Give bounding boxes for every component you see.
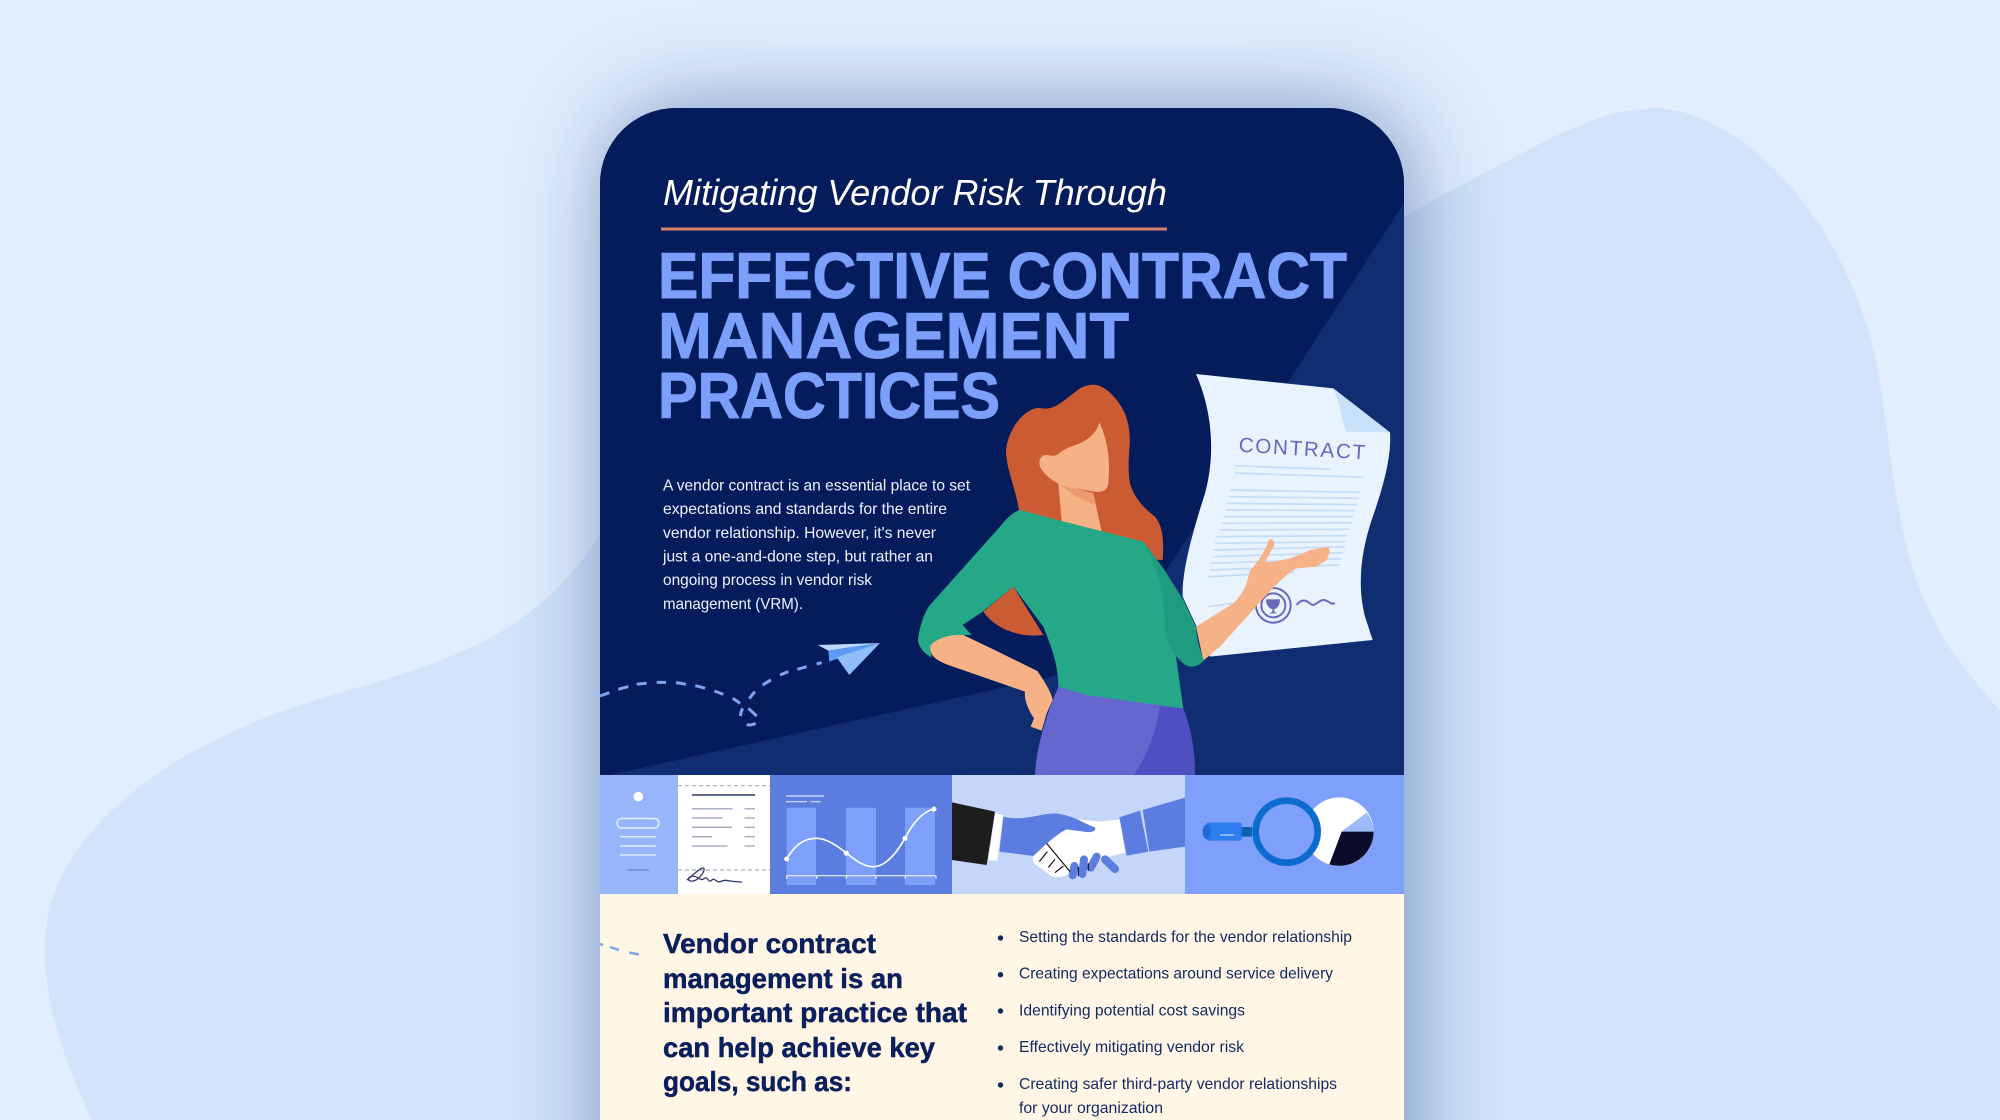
goals heading: goals, such as:	[663, 1066, 852, 1097]
skirt	[1035, 687, 1195, 775]
goals bullet list: Creating safer third-party vendor relationships	[1019, 1076, 1337, 1093]
hair	[983, 385, 1163, 636]
main heading: PRACTICES	[658, 359, 1000, 432]
left arm	[930, 635, 1053, 731]
hero panel background	[600, 108, 1404, 775]
goals bullet list: Setting the standards for the vendor relationship	[1019, 929, 1352, 946]
goals bullet list	[998, 929, 1352, 1117]
main heading	[658, 239, 1347, 432]
main heading: EFFECTIVE CONTRACT	[658, 239, 1347, 312]
title: subtitle line: Mitigating Vendor Risk Through	[663, 172, 1167, 213]
icon tile: bar and line chart	[770, 775, 952, 894]
right arm	[1196, 539, 1330, 661]
cream goals panel	[600, 894, 1404, 1120]
face	[1039, 422, 1109, 492]
goals heading: important practice that	[663, 997, 967, 1028]
intro paragraph: management (VRM).	[663, 596, 803, 613]
goals heading: management is an	[663, 963, 903, 994]
icon tile: signed document	[678, 775, 770, 894]
intro paragraph: ongoing process in vendor risk	[663, 572, 873, 589]
intro paragraph: just a one-and-done step, but rather an	[662, 548, 933, 566]
illustration: contract document	[1183, 374, 1390, 657]
neck	[1058, 483, 1102, 532]
intro paragraph: expectations and standards for the entire	[663, 501, 947, 518]
goals bullet list: Creating expectations around service delivery	[1019, 966, 1333, 982]
illustration: woman presenting contract	[918, 385, 1330, 775]
intro paragraph: A vendor contract is an essential place to set	[663, 478, 971, 494]
infographic card	[600, 108, 1404, 1120]
intro paragraph	[662, 478, 971, 613]
right sleeve	[1145, 543, 1204, 667]
goals heading: Vendor contract	[663, 928, 876, 959]
icon: paper plane with dashed trail	[600, 643, 880, 725]
icon strip	[600, 775, 1404, 894]
goals heading: can help achieve key	[663, 1032, 936, 1063]
goals bullet list: Effectively mitigating vendor risk	[1019, 1039, 1245, 1056]
goals bullet list: Identifying potential cost savings	[1019, 1002, 1245, 1020]
main heading: MANAGEMENT	[658, 299, 1129, 372]
goals bullet list: for your organization	[1019, 1100, 1163, 1117]
green top	[918, 510, 1183, 708]
intro paragraph: vendor relationship. However, it's never	[663, 525, 937, 542]
icon tile: handshake	[952, 775, 1185, 894]
goals heading	[663, 928, 967, 1097]
orange rule	[661, 228, 1167, 230]
icon tile: magnifier over pie chart	[1185, 775, 1404, 894]
illustration: contract document: CONTRACT	[1238, 434, 1366, 464]
icon tile: form	[600, 775, 678, 894]
